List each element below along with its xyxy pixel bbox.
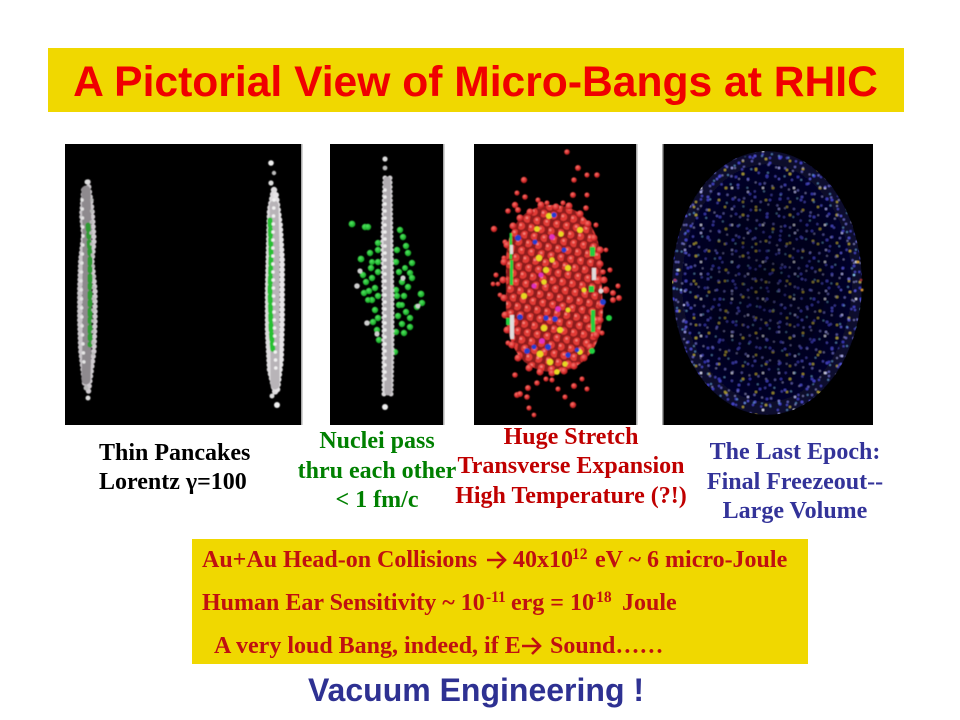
caption: nuclei pass: < 1 fm/c bbox=[336, 487, 419, 513]
title: A Pictorial View of Micro-Bangs at RHIC bbox=[73, 58, 878, 106]
footer: vacuum engineering: Vacuum Engineering ! bbox=[308, 672, 644, 708]
caption: huge stretch: High Temperature (?!) bbox=[455, 483, 687, 509]
white column bbox=[383, 178, 392, 395]
callout: energy comparison bbox=[192, 539, 808, 664]
caption: last epoch: Large Volume bbox=[723, 498, 868, 524]
caption: last epoch: Final Freezeout-- bbox=[707, 469, 883, 495]
caption: last epoch: The Last Epoch: bbox=[710, 439, 880, 465]
bright rim bbox=[677, 158, 857, 408]
line: collision energy: 40x10 bbox=[513, 547, 573, 573]
green participants bbox=[349, 221, 425, 355]
line: ear sensitivity: Human Ear Sensitivity ~ 10 bbox=[202, 590, 485, 616]
panel: final freezeout simulation bbox=[662, 144, 873, 425]
coloured particles bbox=[521, 213, 586, 375]
caption: thin pancakes: Lorentz γ=100 bbox=[99, 469, 247, 495]
right pancake bbox=[268, 190, 282, 395]
line: loud bang bbox=[214, 633, 663, 659]
caption: nuclei pass: Nuclei pass bbox=[319, 428, 435, 454]
caption: huge stretch bbox=[455, 424, 687, 509]
caption: thin pancakes bbox=[99, 440, 250, 495]
line: collision energy: Au+Au Head-on Collisions bbox=[202, 547, 477, 573]
line: collision energy: 12 bbox=[572, 546, 588, 563]
line: ear sensitivity: -18 bbox=[591, 589, 612, 606]
caption: thin pancakes: Thin Pancakes bbox=[99, 440, 250, 466]
line: ear sensitivity: -11 bbox=[486, 589, 506, 606]
red fireball bbox=[506, 205, 603, 372]
caption: nuclei pass: thru each other bbox=[298, 458, 457, 484]
fireball edge bbox=[509, 222, 517, 230]
scattered red particles bbox=[491, 149, 622, 417]
line: loud bang: A very loud Bang, indeed, if E bbox=[214, 633, 521, 659]
caption: huge stretch: Transverse Expansion bbox=[458, 453, 684, 479]
line: ear sensitivity: Joule bbox=[622, 590, 677, 616]
panel: thin pancakes simulation bbox=[65, 144, 302, 425]
line: loud bang: Sound…… bbox=[550, 633, 663, 659]
panel: nuclei pass simulation bbox=[330, 144, 444, 425]
left pancake bbox=[80, 182, 95, 395]
caption: nuclei pass bbox=[298, 428, 457, 513]
line: ear sensitivity bbox=[202, 589, 677, 616]
line: collision energy bbox=[202, 546, 788, 573]
panel: huge stretch simulation bbox=[474, 144, 638, 425]
line: ear sensitivity: erg = 10 bbox=[511, 590, 594, 616]
line: collision energy: eV ~ 6 micro-Joule bbox=[595, 547, 788, 573]
caption: huge stretch: Huge Stretch bbox=[504, 424, 638, 450]
darker core bbox=[675, 155, 859, 411]
caption: last epoch bbox=[707, 439, 883, 524]
